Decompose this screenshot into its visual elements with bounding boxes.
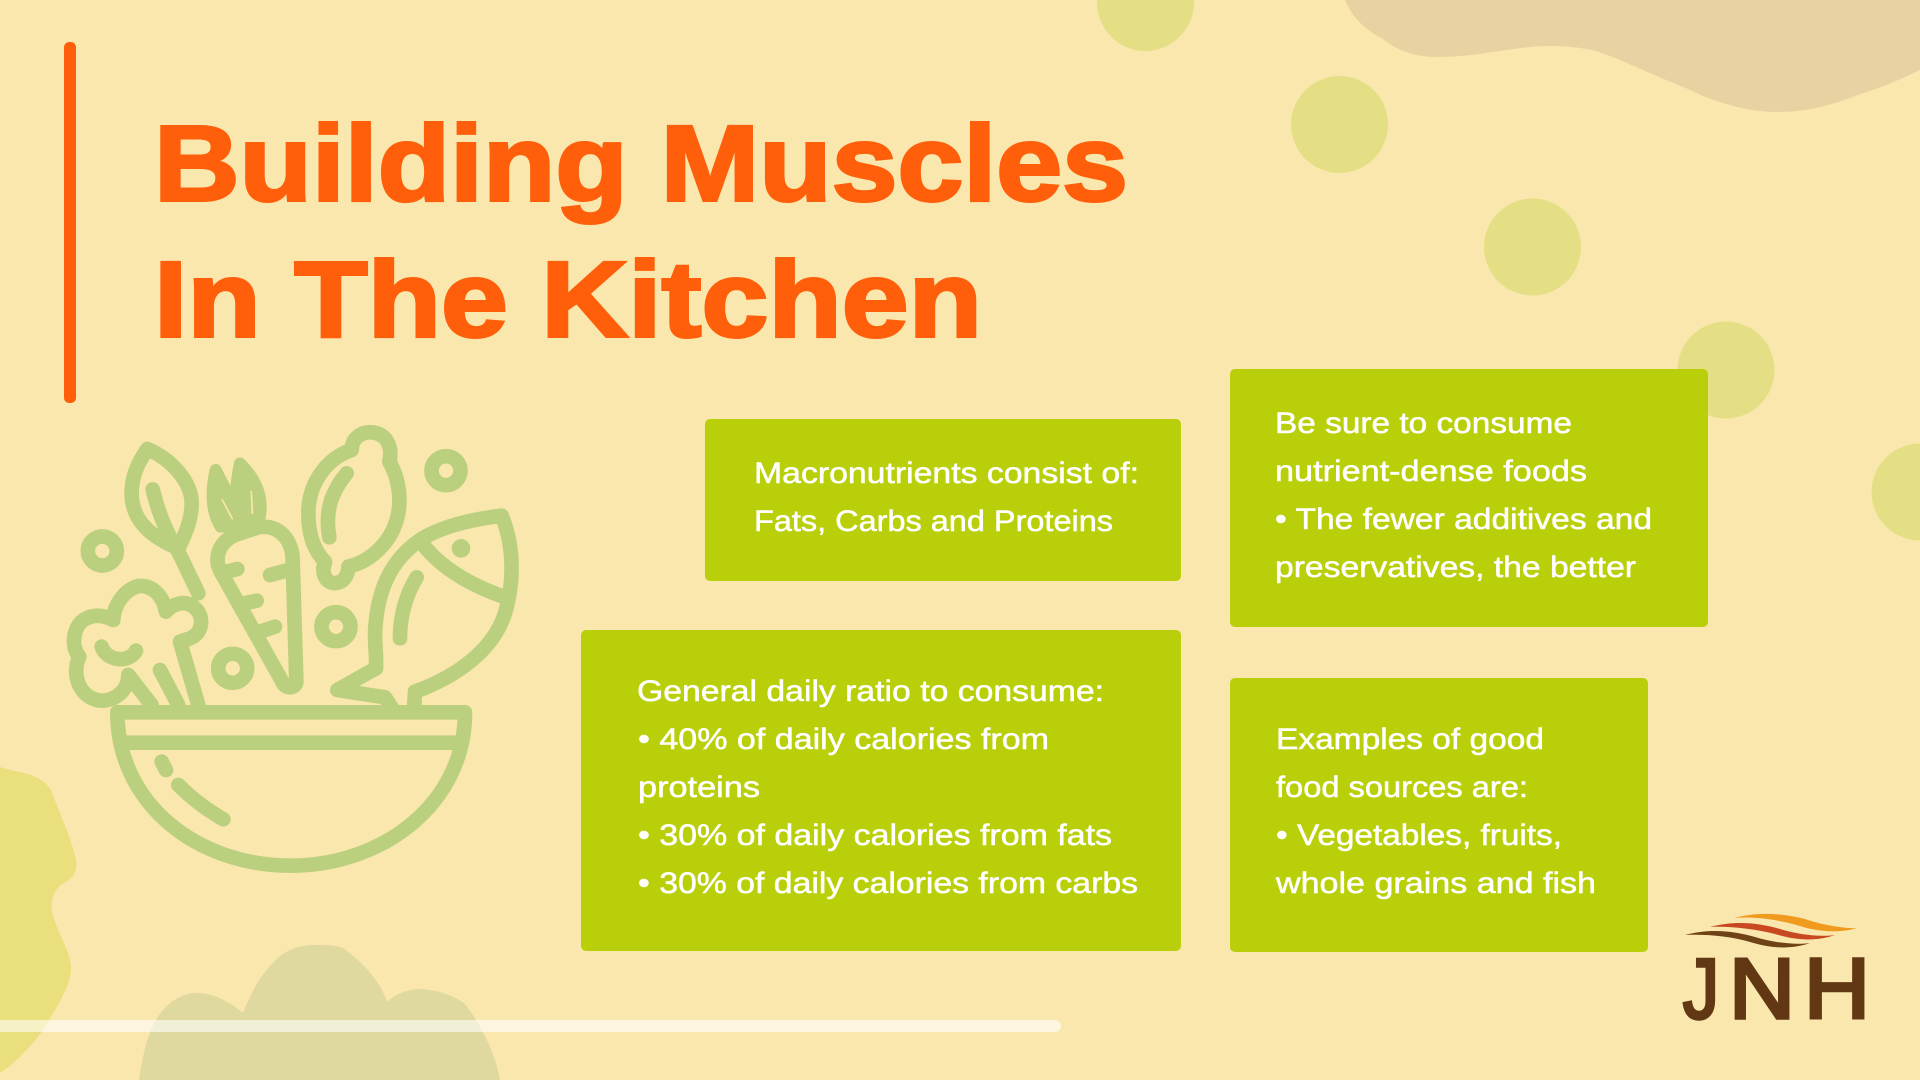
lemon bbox=[308, 432, 399, 583]
logo letters: H bbox=[1804, 942, 1870, 1037]
panel: daily ratio bbox=[581, 630, 1181, 951]
ring 1 bbox=[431, 456, 460, 485]
bowl bbox=[117, 712, 465, 866]
decorative circles bbox=[1097, 0, 1920, 540]
ring 3 bbox=[321, 612, 350, 641]
panel background bbox=[1230, 369, 1708, 627]
logo letters: J bbox=[1683, 942, 1719, 1037]
text: daily ratio: • 30% of daily calories from fats bbox=[638, 819, 1112, 852]
text: nutrient-dense foods: • The fewer additives and bbox=[1275, 503, 1652, 536]
panel background bbox=[1230, 678, 1648, 952]
title line 1: Building Muscles bbox=[154, 102, 1128, 224]
text: nutrient-dense foods: preservatives, the better bbox=[1275, 551, 1636, 584]
title bbox=[154, 102, 1128, 360]
text: daily ratio: General daily ratio to consume: bbox=[637, 675, 1104, 708]
text: food sources bbox=[1275, 723, 1596, 900]
ring 2 bbox=[88, 536, 117, 565]
panel: food sources bbox=[1230, 678, 1648, 952]
text: daily ratio: • 30% of daily calories from carbs bbox=[638, 867, 1138, 900]
fish bbox=[337, 516, 512, 710]
text: food sources: Examples of good bbox=[1276, 723, 1544, 756]
text: macronutrients: Macronutrients consist of: bbox=[754, 457, 1139, 490]
text: nutrient-dense foods: Be sure to consume bbox=[1275, 407, 1572, 440]
text: food sources: whole grains and fish bbox=[1275, 867, 1596, 900]
logo: JNH bbox=[1683, 914, 1870, 1037]
text: daily ratio: • 40% of daily calories from bbox=[638, 723, 1049, 756]
decorative blob: top right bbox=[1345, 0, 1920, 112]
leaf bbox=[132, 449, 198, 593]
icon: salad bowl with vegetables and fish bbox=[74, 432, 512, 866]
logo letters: N bbox=[1729, 942, 1795, 1037]
logo letters bbox=[1683, 942, 1870, 1037]
decorative bar: translucent white strip bbox=[0, 1020, 1061, 1032]
logo swoosh: red bbox=[1710, 923, 1835, 939]
logo swoosh: orange bbox=[1734, 914, 1857, 931]
text: daily ratio: proteins bbox=[638, 771, 760, 804]
carrot bbox=[213, 463, 296, 687]
logo swoosh: brown bbox=[1685, 931, 1810, 947]
panel background bbox=[705, 419, 1181, 581]
text: nutrient-dense foods bbox=[1275, 407, 1652, 584]
decorative blob: bottom bbox=[139, 945, 500, 1080]
text: daily ratio bbox=[637, 675, 1138, 900]
text: macronutrients: Fats, Carbs and Proteins bbox=[754, 505, 1113, 538]
text: food sources: food sources are: bbox=[1276, 771, 1528, 804]
decorative blob: left bbox=[0, 767, 76, 1073]
panel: nutrient-dense foods bbox=[1230, 369, 1708, 627]
title accent bar bbox=[64, 42, 76, 403]
panel background bbox=[581, 630, 1181, 951]
ring 4 bbox=[218, 654, 247, 683]
text: food sources: • Vegetables, fruits, bbox=[1276, 819, 1562, 852]
broccoli bbox=[74, 586, 201, 705]
text: macronutrients bbox=[754, 457, 1139, 538]
text: nutrient-dense foods: nutrient-dense foods bbox=[1275, 455, 1587, 488]
title line 2: In The Kitchen bbox=[154, 238, 982, 360]
panel: macronutrients bbox=[705, 419, 1181, 581]
